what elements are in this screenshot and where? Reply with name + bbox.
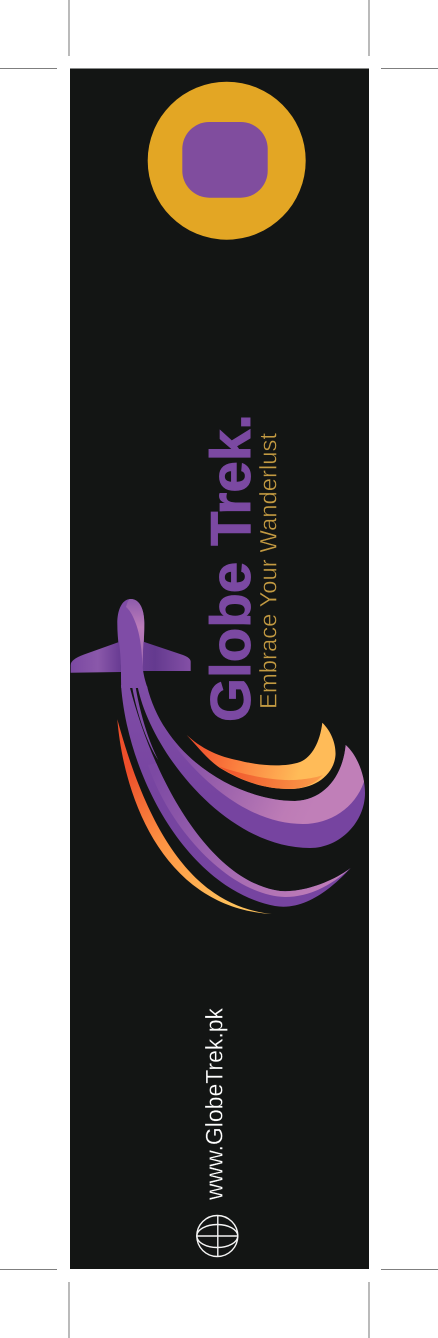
right wing [143,642,191,671]
tagline: Embrace Your Wanderlust [256,433,282,709]
orange upper swoosh [187,723,336,789]
sliver between tail slits [132,686,158,760]
nose highlight [126,599,144,668]
icon: globe [197,1216,238,1256]
brand name: Globe Trek. [199,414,263,722]
yellow circle with purple rounded square [148,82,306,240]
main purple swoosh [138,686,365,848]
orange lower streak [117,719,272,914]
black panel [70,68,369,1269]
lower purple swoosh [121,685,351,907]
website url: www.GlobeTrek.pk [202,1007,229,1201]
fuselage [117,599,148,688]
left wing [71,642,121,673]
lower swoosh highlight [156,763,350,897]
airplane logo [71,599,370,914]
main swoosh highlight [164,726,364,824]
